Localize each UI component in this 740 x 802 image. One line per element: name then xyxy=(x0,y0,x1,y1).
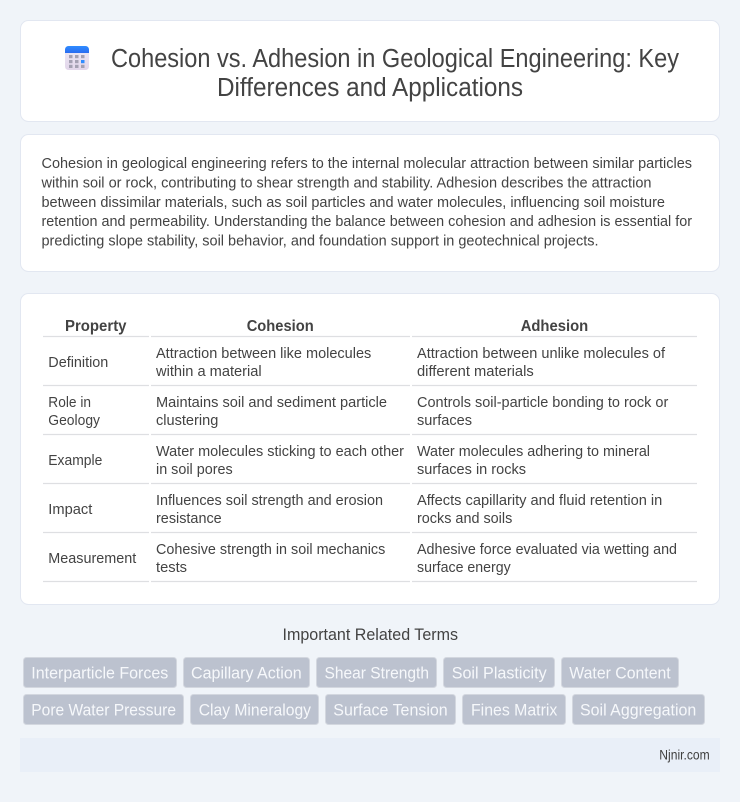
table row: example: Water molecules sticking to each other xyxy=(156,443,404,460)
table row: definition: within a material xyxy=(155,363,262,380)
footer xyxy=(20,738,720,772)
text block: summary: within soil or rock, contributing to shear strength and stability. Adhesion describes the attraction xyxy=(41,174,651,192)
table row: impact: Impact xyxy=(48,501,93,518)
tag: water content xyxy=(562,658,678,688)
table row: measurement: Cohesive strength in soil mechanics xyxy=(156,541,385,558)
table row: impact: Influences soil strength and erosion xyxy=(156,492,383,509)
table row: impact xyxy=(48,492,662,527)
footer: Njnir.com xyxy=(659,747,710,762)
heading: important related terms: Important Related Terms xyxy=(282,626,458,644)
tag: interparticle forces: Interparticle Forces xyxy=(31,663,168,682)
text block: summary: between dissimilar materials, such as soil particles and water molecules, influencing soil moisture xyxy=(42,194,665,211)
icon: calendar xyxy=(65,46,89,70)
tag: surface tension: Surface Tension xyxy=(333,700,448,719)
table row: example: Example xyxy=(48,452,102,469)
panel: comparison table xyxy=(20,294,720,604)
tag: soil plasticity: Soil Plasticity xyxy=(452,663,547,682)
tag: clay mineralogy xyxy=(190,694,318,724)
table row: measurement: Measurement xyxy=(48,550,137,567)
table row: role in geology: Role in xyxy=(48,394,91,411)
tag: soil aggregation: Soil Aggregation xyxy=(580,700,696,719)
table header: Cohesion xyxy=(247,318,314,335)
table row: example xyxy=(48,443,650,478)
title xyxy=(111,45,679,102)
tag group: related terms xyxy=(24,658,704,724)
tag: shear strength xyxy=(316,658,436,688)
text block: summary: retention and permeability. Understanding the balance between cohesion and adhesion is essential for xyxy=(42,213,692,230)
table row: definition: Attraction between like molecules xyxy=(156,345,371,362)
table row: definition: Attraction between unlike molecules of xyxy=(417,345,666,362)
table row: definition: Definition xyxy=(48,354,108,371)
tag: pore water pressure: Pore Water Pressure xyxy=(31,700,176,719)
tag: shear strength: Shear Strength xyxy=(324,663,429,682)
tag: surface tension xyxy=(326,694,456,724)
table row: measurement: surface energy xyxy=(417,559,511,576)
tag: capillary action xyxy=(184,658,310,688)
table row: impact: resistance xyxy=(156,510,222,527)
tag: capillary action: Capillary Action xyxy=(191,663,302,682)
text block: summary: predicting slope stability, soil behavior, and foundation support in geotechnical projects. xyxy=(42,232,598,250)
panel: summary paragraph xyxy=(20,134,720,272)
table header: Adhesion xyxy=(521,318,588,335)
text block: summary xyxy=(41,155,692,250)
tag: clay mineralogy: Clay Mineralogy xyxy=(199,700,312,719)
tag: water content: Water Content xyxy=(569,663,671,682)
tag: pore water pressure xyxy=(24,694,184,724)
tag: fines matrix: Fines Matrix xyxy=(471,700,558,719)
table row: role in geology: surfaces xyxy=(417,412,472,429)
title: Cohesion vs. Adhesion in Geological Engineering: Key xyxy=(111,45,679,73)
table row: definition: different materials xyxy=(417,363,534,380)
tag: soil aggregation xyxy=(572,694,704,724)
text block: summary: Cohesion in geological engineering refers to the internal molecular attraction between similar particles xyxy=(42,155,692,172)
table row: impact: rocks and soils xyxy=(417,510,512,527)
tag: interparticle forces xyxy=(24,658,176,688)
table row: measurement: Adhesive force evaluated via wetting and xyxy=(417,541,677,558)
table row: role in geology: Geology xyxy=(48,412,100,429)
table header xyxy=(65,318,588,335)
table row: role in geology xyxy=(48,394,668,429)
tag: soil plasticity xyxy=(444,658,554,688)
table header: Property xyxy=(65,318,127,335)
table row: measurement xyxy=(48,541,677,576)
table row: impact: Affects capillarity and fluid retention in xyxy=(417,492,662,509)
table row: example: Water molecules adhering to mineral xyxy=(417,443,650,460)
table row: example: in soil pores xyxy=(156,461,233,478)
title: Differences and Applications xyxy=(217,74,523,102)
table row: definition xyxy=(48,345,666,380)
table row: example: surfaces in rocks xyxy=(417,461,526,478)
table row: role in geology: Controls soil-particle bonding to rock or xyxy=(417,394,668,411)
tag: fines matrix xyxy=(462,694,566,724)
table row: measurement: tests xyxy=(156,559,187,576)
table row: role in geology: Maintains soil and sediment particle xyxy=(156,394,387,411)
table row: role in geology: clustering xyxy=(156,412,218,429)
panel: title card xyxy=(20,20,720,122)
